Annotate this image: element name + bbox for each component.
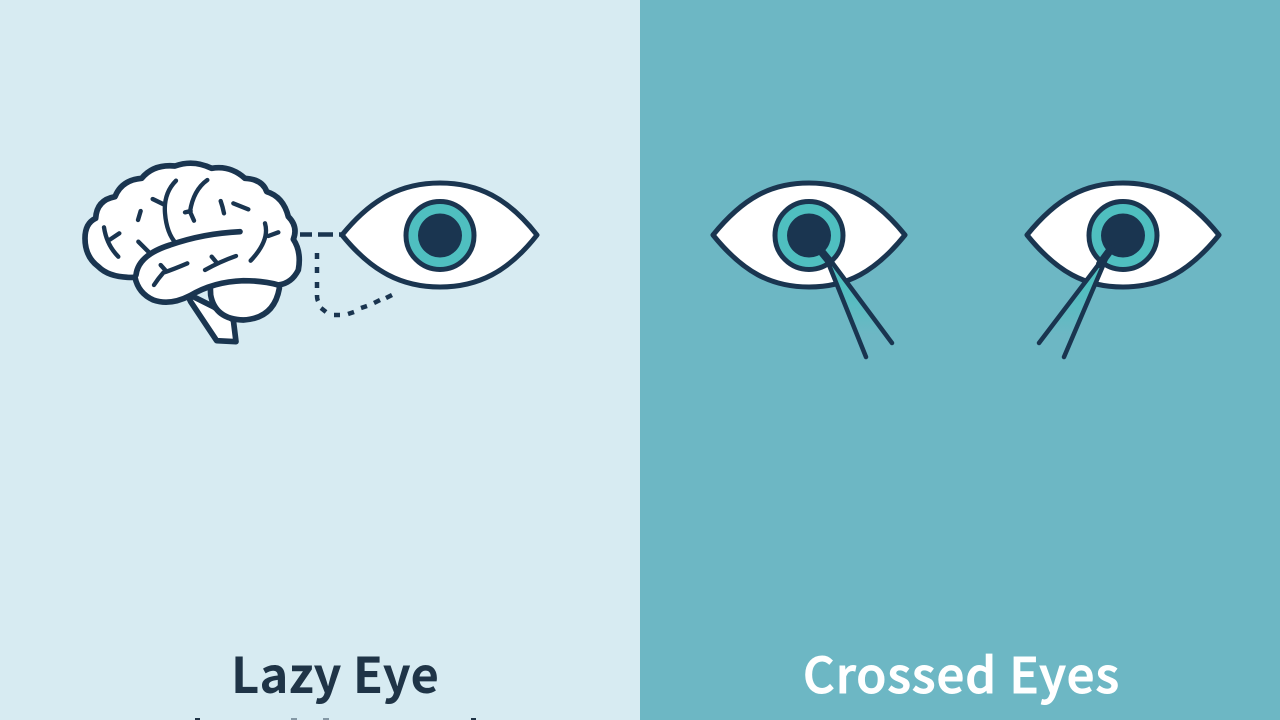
brain stem	[187, 293, 236, 342]
gaze beam	[825, 255, 892, 357]
heading: lazy eye: Lazy Eye	[231, 637, 439, 708]
sulci	[104, 180, 278, 285]
gaze beam	[1039, 254, 1108, 357]
dashed connector: brain to eye	[300, 232, 345, 237]
icon: left crossed eye	[713, 183, 905, 357]
cerebellum	[210, 280, 279, 320]
dashed connector: looping path	[317, 253, 392, 315]
icon: brain	[85, 163, 299, 342]
heading: crossed eyes: Crossed Eyes	[803, 637, 1119, 708]
panel: lazy eye	[0, 0, 640, 720]
panel: crossed eyes	[640, 0, 1280, 720]
clipped second line marks	[195, 718, 476, 720]
cerebrum outline	[85, 163, 299, 302]
temporal lobe fold	[136, 232, 240, 275]
icon: lazy eye	[342, 183, 537, 287]
icon: right crossed eye	[1027, 183, 1219, 357]
